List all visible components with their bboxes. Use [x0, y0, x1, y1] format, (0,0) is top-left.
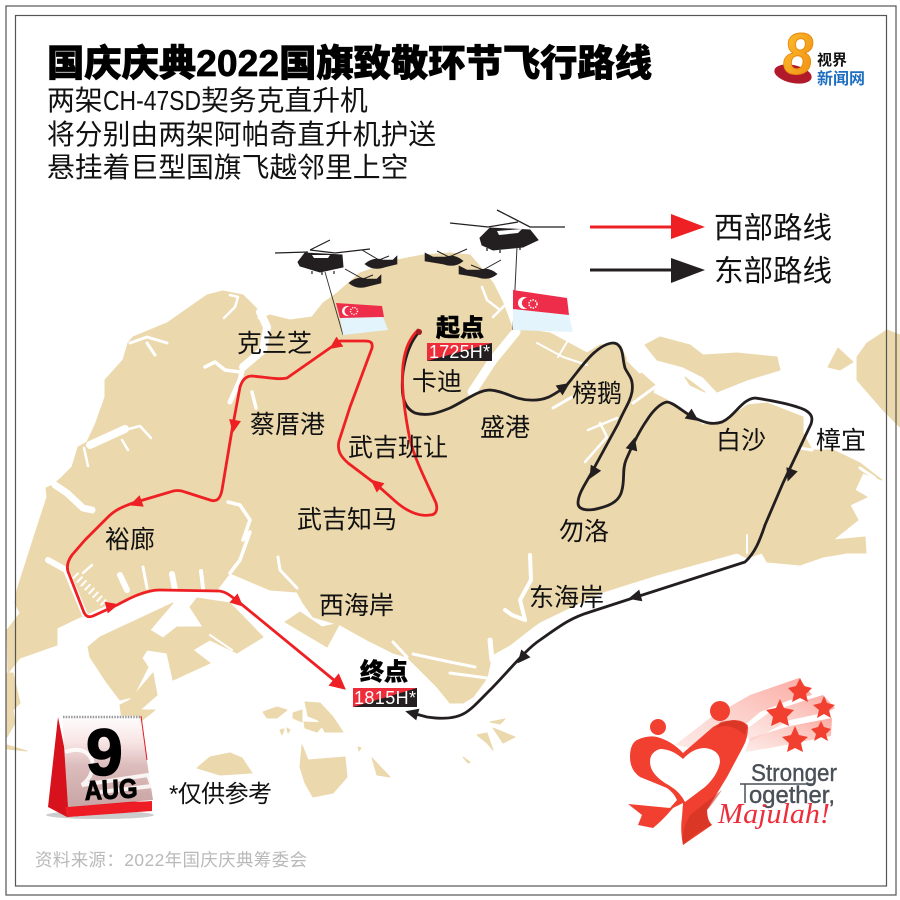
end marker: 终点 1815H: 终点: [360, 658, 408, 686]
place labels: 樟宜: [816, 427, 866, 455]
route: east (black): [402, 332, 812, 720]
logo: Stronger Together Majulah: Majulah!: [717, 798, 830, 830]
place labels: 西海岸: [319, 592, 394, 620]
subtitle text block: 将分别由两架阿帕奇直升机护送: [47, 119, 436, 150]
subtitle text block: [47, 85, 436, 183]
direction arrows: west route: [105, 337, 384, 696]
start marker: 起点 1725H: [416, 315, 492, 362]
stars: [766, 678, 835, 752]
note: for reference only: *仅供参考: [169, 781, 272, 808]
place labels: [105, 330, 866, 620]
end marker: 终点 1815H: [353, 658, 417, 708]
place labels: 武吉班让: [348, 434, 448, 462]
place labels: 蔡厝港: [250, 411, 325, 439]
legend: route key: [590, 212, 832, 288]
place labels: 克兰芝: [237, 330, 312, 358]
legend arrow: west route: [590, 214, 705, 239]
comet tails: [675, 678, 835, 752]
logo wordmark: Stronger: [751, 760, 837, 787]
helicopters carrying flags: [275, 210, 573, 335]
icon: desk calendar 9 AUG: AUG: [84, 773, 138, 806]
subtitle text block: 两架: [47, 85, 103, 116]
logo: Stronger Together Majulah: [628, 678, 837, 845]
icon: desk calendar 9 AUG: [46, 715, 154, 819]
title: 国庆庆典2022国旗致敬环节飞行路线: [47, 43, 652, 84]
place labels: 盛港: [480, 414, 530, 442]
place labels: 榜鹅: [572, 380, 622, 408]
subtitle text block: 悬挂着巨型国旗飞越邻里上空: [47, 152, 408, 183]
place labels: 卡迪: [412, 368, 462, 396]
logo wordmark: [740, 760, 837, 809]
source text: 资料来源：2022年国庆庆典筹委会: [35, 850, 307, 870]
subtitle text block: CH-47SD: [103, 85, 201, 116]
legend label: west route: 西部路线: [714, 212, 832, 245]
place labels: 裕廊: [105, 526, 155, 554]
helicopter: attack 4: [459, 260, 501, 278]
rivers and inlets: [48, 287, 875, 678]
end marker: 终点 1815H: 1815H*: [354, 688, 416, 708]
flag: right Singapore flag: [513, 247, 573, 332]
route: west (red): [67, 330, 437, 696]
direction arrows: east route: [404, 378, 798, 720]
start marker: 起点 1725H: 1725H*: [429, 342, 490, 362]
icon: desk calendar 9 AUG: 9: [86, 715, 123, 789]
main island: [7, 253, 900, 797]
helicopter: attack 3: [425, 249, 467, 265]
heart ribbon shading: [683, 721, 748, 845]
logo: Channel 8 news: [773, 22, 865, 88]
heart ribbon silhouette: [628, 720, 748, 845]
logo: Channel 8 news: 视界: [817, 52, 847, 69]
subtitle text block: 契务克直升机: [201, 85, 368, 116]
logo wordmark: ogether,: [749, 782, 835, 809]
helicopter: right Chinook: [450, 210, 565, 253]
place labels: 东海岸: [529, 584, 604, 612]
logo: Channel 8 news: 新闻网: [817, 69, 865, 88]
helicopter: attack 2: [345, 269, 381, 287]
logo: Channel 8 news: 8: [783, 22, 814, 87]
place labels: 勿洛: [559, 518, 609, 546]
legend label: east route: 东部路线: [714, 255, 832, 288]
helicopter: left Chinook: [275, 240, 370, 275]
place labels: 白沙: [716, 427, 766, 455]
figures: heads: [650, 719, 666, 735]
flag: left Singapore flag: [325, 272, 388, 335]
start marker: 起点 1725H: 起点: [436, 315, 484, 342]
helicopter: attack 1: [362, 250, 397, 268]
legend arrow: east route: [590, 258, 705, 283]
place labels: 武吉知马: [297, 506, 397, 534]
white heart: [650, 748, 720, 802]
map: Singapore island and surrounding islands: [7, 253, 900, 797]
